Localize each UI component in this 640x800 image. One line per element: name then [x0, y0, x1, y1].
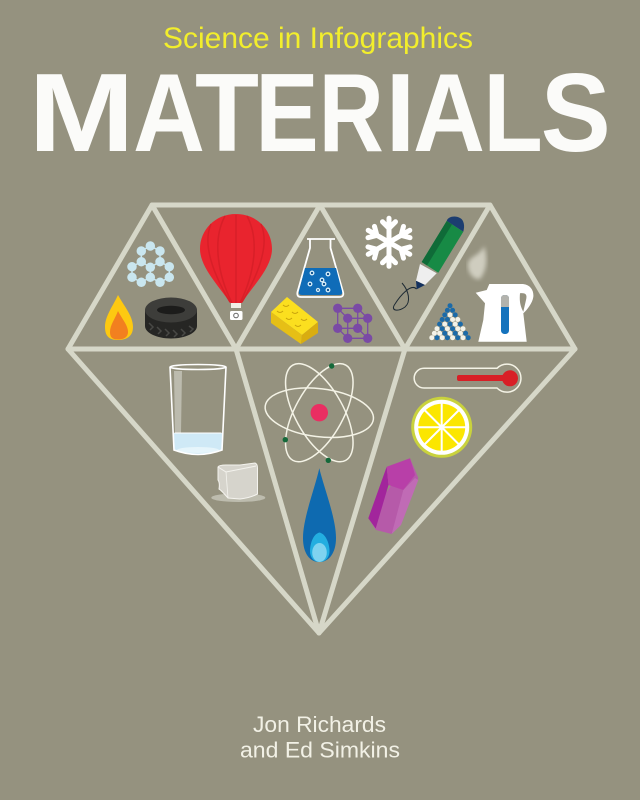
- icon: flask: [297, 239, 343, 297]
- author names: [240, 712, 400, 762]
- icon: kettle: [476, 284, 533, 342]
- icon: molecule: [128, 242, 173, 286]
- icon: tyre: [145, 298, 197, 338]
- main title: I: [386, 51, 415, 175]
- icon: purple crystal: [368, 458, 418, 534]
- diamond outline: [68, 205, 575, 633]
- main title: M: [28, 51, 134, 175]
- author names: Jon Richards: [253, 712, 386, 737]
- icon: lemon slice: [411, 397, 472, 458]
- icon: thermometer: [414, 364, 521, 392]
- icon: steam: [468, 246, 486, 279]
- icon: toy brick: [271, 297, 318, 344]
- icon: hot air balloon: [200, 214, 272, 320]
- icon: atom: [262, 353, 376, 472]
- icon: marker pen: [393, 217, 464, 310]
- icon: crystal lattice: [334, 304, 372, 342]
- main title: E: [255, 51, 319, 175]
- main title: A: [413, 51, 485, 175]
- main title: T: [195, 51, 259, 175]
- main title: R: [319, 51, 384, 175]
- series title: Science in Infographics: [163, 22, 473, 55]
- main title: L: [483, 51, 543, 175]
- icon: gas flame: [303, 468, 336, 562]
- icon: flame: [105, 295, 133, 340]
- icon: snowflake: [365, 218, 413, 266]
- icon: ice cube: [211, 463, 265, 502]
- icon: particle pyramid: [429, 303, 471, 340]
- author names: and Ed Simkins: [240, 737, 400, 762]
- main title: A: [133, 51, 205, 175]
- icon: glass of water: [170, 364, 226, 455]
- main title: S: [541, 51, 611, 175]
